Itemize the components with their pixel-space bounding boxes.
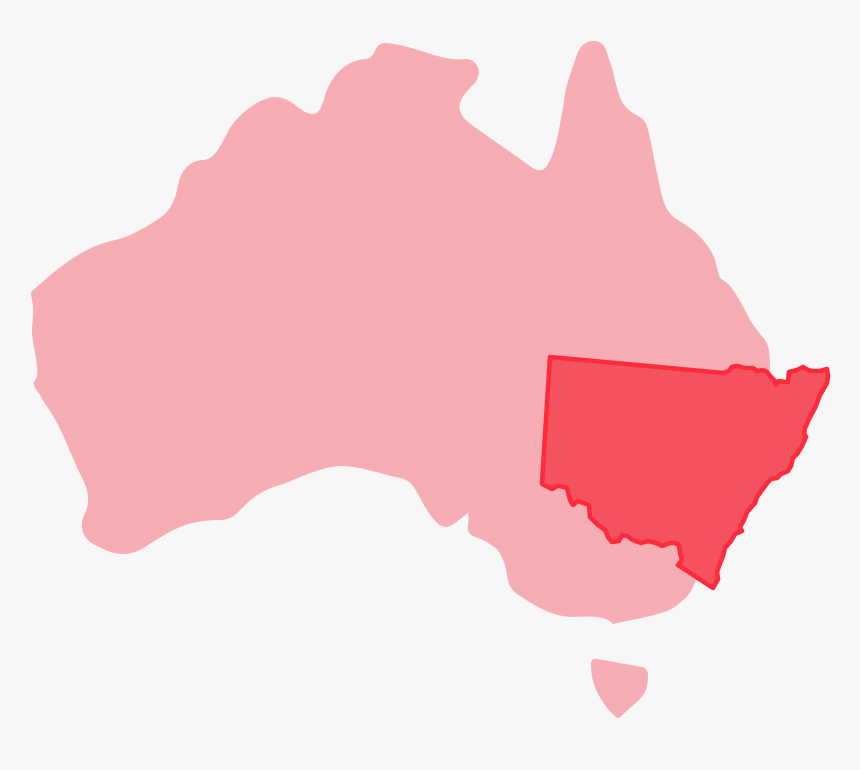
Tasmania [591, 659, 648, 718]
New South Wales [542, 357, 828, 588]
mainland Australia [31, 41, 770, 624]
